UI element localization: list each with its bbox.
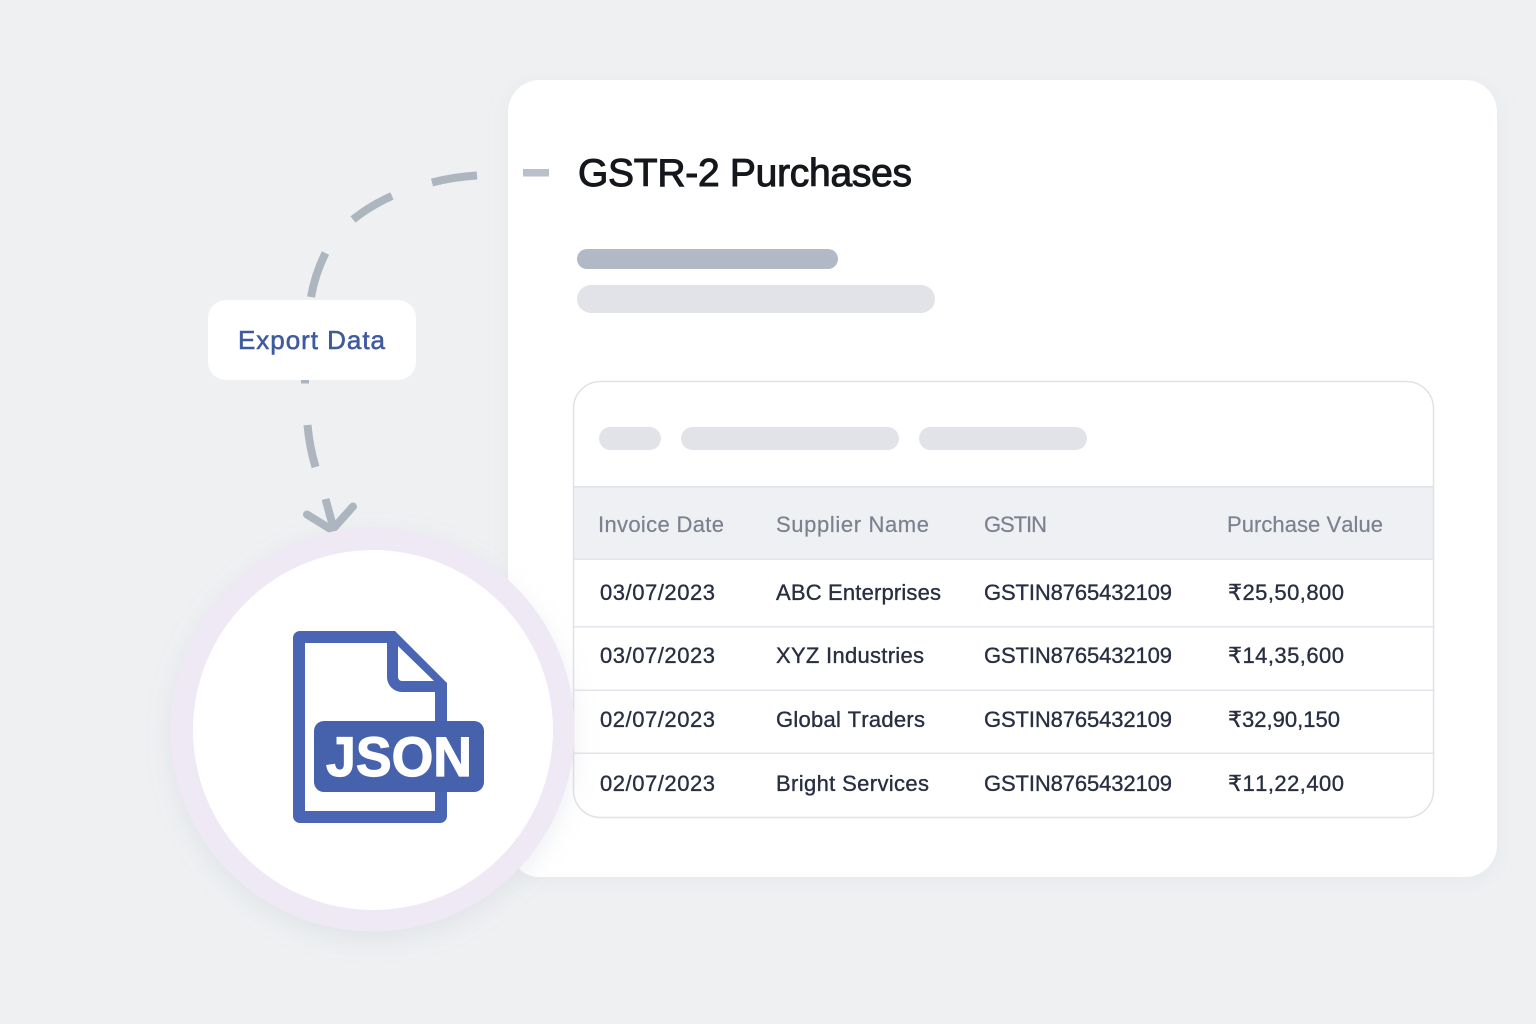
row: XYZ Industries: XYZ Industries — [776, 643, 924, 668]
table header labels: GSTIN — [984, 512, 1047, 537]
row: Bright Services — [600, 771, 1344, 796]
row: Global Traders: ₹32,90,150 — [1228, 707, 1340, 732]
table header labels: Supplier Name — [776, 512, 929, 537]
icon: JSON file badge circle — [170, 528, 574, 932]
panel: GSTR-2 purchases card — [508, 80, 1497, 877]
circle inner — [193, 550, 553, 910]
table header band — [573, 486, 1434, 754]
row: Bright Services: GSTIN8765432109 — [984, 771, 1172, 796]
table header labels: Purchase Value — [1227, 512, 1383, 537]
table header labels: Invoice Date — [598, 512, 724, 537]
row: XYZ Industries: 03/07/2023 — [600, 643, 715, 668]
arrow: dashed export path — [305, 169, 549, 530]
callout: Export Data pill: Export Data — [238, 325, 386, 355]
row: Bright Services: Bright Services — [776, 771, 929, 796]
row: Global Traders: GSTIN8765432109 — [984, 707, 1172, 732]
panel: data table — [573, 382, 1434, 818]
row: Global Traders: 02/07/2023 — [600, 707, 715, 732]
row: ABC Enterprises — [600, 580, 1344, 605]
placeholder: filter chips — [599, 427, 1087, 450]
row: Global Traders — [600, 707, 1340, 732]
table header labels — [598, 512, 1383, 537]
row: Bright Services: ₹11,22,400 — [1228, 771, 1344, 796]
placeholder: heading bar — [577, 249, 838, 269]
row: ABC Enterprises: ₹25,50,800 — [1228, 580, 1344, 605]
table background — [574, 382, 1434, 818]
table outline — [574, 382, 1434, 818]
icon: document — [293, 631, 447, 823]
circle ring — [170, 528, 574, 932]
callout: Export Data pill — [208, 300, 416, 380]
row: XYZ Industries — [600, 643, 1344, 668]
row: ABC Enterprises: GSTIN8765432109 — [984, 580, 1172, 605]
label: JSON badge: JSON — [326, 725, 472, 788]
row: ABC Enterprises: ABC Enterprises — [776, 580, 941, 605]
row: ABC Enterprises: 03/07/2023 — [600, 580, 715, 605]
infographic canvas — [193, 80, 1497, 936]
row: Global Traders: Global Traders — [776, 707, 925, 732]
row: XYZ Industries: GSTIN8765432109 — [984, 643, 1172, 668]
placeholder: subheading bar — [577, 285, 935, 313]
row: XYZ Industries: ₹14,35,600 — [1228, 643, 1344, 668]
row: Bright Services: 02/07/2023 — [600, 771, 715, 796]
title: GSTR-2 Purchases — [578, 152, 912, 195]
